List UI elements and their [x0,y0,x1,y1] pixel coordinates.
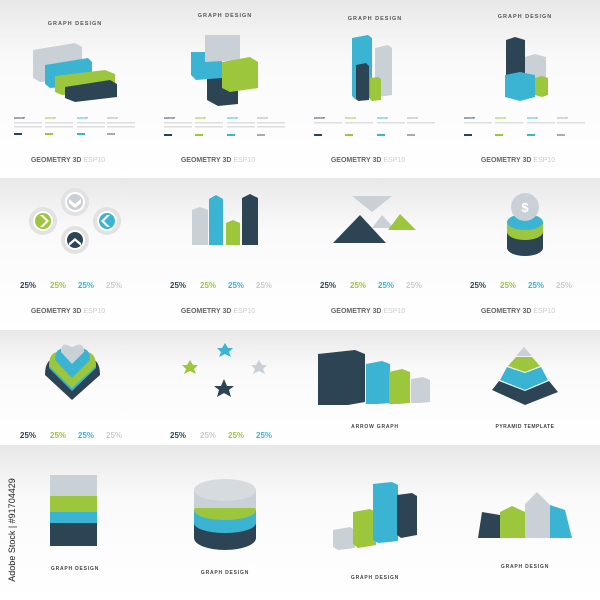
tile 8: coin stack: 25% [500,281,516,290]
tile 2: cross cubes: GROUP [195,116,206,120]
tile 16: mountain graph: GRAPH DESIGN [501,564,549,570]
tile 1: stairs graph: GEOMETRY 3D ESP10 [31,157,105,164]
tile 4: hexagon columns: GROUP [495,116,506,120]
tile 1: stairs graph: GROUP [45,116,56,120]
tile 14: cylinder stack [194,479,256,576]
tile 9: layered hearts: 25% [50,431,66,440]
tile 8: coin stack: 25% [556,281,572,290]
tile 12: pyramid: PYRAMID TEMPLATE [495,424,555,430]
tile 9: layered hearts: 25% [106,431,122,440]
stock id vertical text: Adobe Stock | #91704429 [7,478,17,582]
tile 5: arrow circles: 25% [20,281,36,290]
tile 3: column bars: GEOMETRY 3D ESP10 [331,157,405,164]
tile 3: column bars: GROUP [345,116,356,120]
tile 9: layered hearts [20,345,122,440]
tile 6: crystal bars: 25% [200,281,216,290]
tile 10: stars: 25% [228,431,244,440]
tile 15: 3D bars: GRAPH DESIGN [351,575,399,581]
tile 15: 3D bars [333,482,417,581]
tile 2: cross cubes: GROUP [164,116,175,120]
tile 10: stars: 25% [256,431,272,440]
tile 3: column bars [314,16,435,164]
tile 8: coin stack: $ [521,200,529,215]
tile 10: stars: 25% [200,431,216,440]
tile 4: hexagon columns: GEOMETRY 3D ESP10 [481,157,555,164]
tile 2: cross cubes: GROUP [227,116,238,120]
tile 6: crystal bars [170,194,272,315]
tile 13: stacked box: GRAPH DESIGN [51,566,99,572]
tile 2: cross cubes [164,13,285,164]
tile 2: cross cubes: GROUP [257,116,268,120]
tile 3: column bars: GROUP [377,116,388,120]
tile 7: triangles: 25% [378,281,394,290]
tile 1: stairs graph: GROUP [107,116,118,120]
tile 10: stars [170,343,272,440]
tile 11: arrow graph: ARROW GRAPH [351,424,399,430]
tile 13: stacked box [50,475,99,572]
tile 11: arrow graph [318,350,430,430]
tile 12: pyramid [492,347,558,430]
tile 4: hexagon columns: GROUP [557,116,568,120]
tile 7: triangles: 25% [406,281,422,290]
tile 3: column bars: GROUP [407,116,418,120]
heading: GRAPH DESIGN [48,21,102,27]
tile 3: column bars: GROUP [314,116,325,120]
tile 7: triangles: 25% [350,281,366,290]
tile 9: layered hearts: 25% [78,431,94,440]
tile 8: coin stack: 25% [470,281,486,290]
tile 8: coin stack: 25% [528,281,544,290]
tile 6: crystal bars: 25% [228,281,244,290]
tile 1: stairs graph [14,21,135,164]
tile 5: arrow circles: 25% [106,281,122,290]
tile 4: hexagon columns: GROUP [464,116,475,120]
tile 4: hexagon columns [464,14,585,164]
tile 5: arrow circles [20,188,122,315]
tile 6: crystal bars: 25% [256,281,272,290]
tile 14: cylinder stack: GRAPH DESIGN [201,570,249,576]
heading: GRAPH DESIGN [498,14,552,20]
tile 8: coin stack: GEOMETRY 3D ESP10 [481,308,555,315]
tile 5: arrow circles: 25% [50,281,66,290]
tile 7: triangles: GEOMETRY 3D ESP10 [331,308,405,315]
tile 9: layered hearts: 25% [20,431,36,440]
tile 10: stars: 25% [170,431,186,440]
tile 8: coin stack [470,193,572,315]
tile 5: arrow circles: 25% [78,281,94,290]
heading: GRAPH DESIGN [198,13,252,19]
tile 6: crystal bars: GEOMETRY 3D ESP10 [181,308,255,315]
tile 7: triangles [320,196,422,315]
tile 1: stairs graph: GROUP [77,116,88,120]
tile 7: triangles: 25% [320,281,336,290]
tile 4: hexagon columns: GROUP [527,116,538,120]
tile 16: mountain graph [478,492,572,570]
tile 2: cross cubes: GEOMETRY 3D ESP10 [181,157,255,164]
tile 6: crystal bars: 25% [170,281,186,290]
heading: GRAPH DESIGN [348,16,402,22]
tile 5: arrow circles: GEOMETRY 3D ESP10 [31,308,105,315]
tile 1: stairs graph: GROUP [14,116,25,120]
